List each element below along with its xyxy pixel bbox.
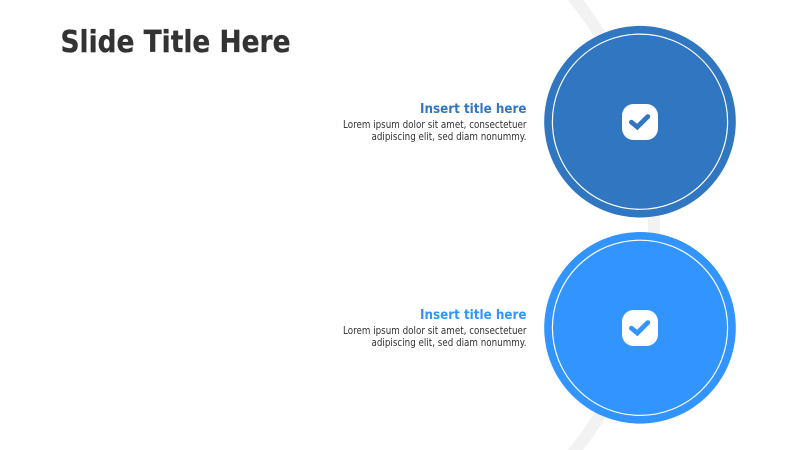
circle 1 bbox=[544, 26, 736, 218]
item 1 body bbox=[343, 119, 527, 143]
circle 2 bbox=[544, 232, 736, 424]
item 2 text bbox=[343, 307, 527, 349]
item 1 body: adipiscing elit, sed diam nonummy. bbox=[372, 131, 526, 143]
item 2 body bbox=[343, 325, 527, 349]
item 1 body: Lorem ipsum dolor sit amet, consectetuer bbox=[343, 119, 527, 131]
item 2 body: adipiscing elit, sed diam nonummy. bbox=[372, 337, 526, 349]
icon: check badge 1 bbox=[622, 104, 658, 140]
item 2 heading: Insert title here bbox=[420, 307, 526, 323]
icon: check badge 2 bbox=[622, 310, 658, 346]
connecting arc bbox=[568, 0, 660, 450]
item 1 text bbox=[343, 101, 527, 143]
item 1 heading: Insert title here bbox=[420, 101, 526, 117]
title: Slide Title Here bbox=[60, 25, 290, 60]
item 2 body: Lorem ipsum dolor sit amet, consectetuer bbox=[343, 325, 527, 337]
